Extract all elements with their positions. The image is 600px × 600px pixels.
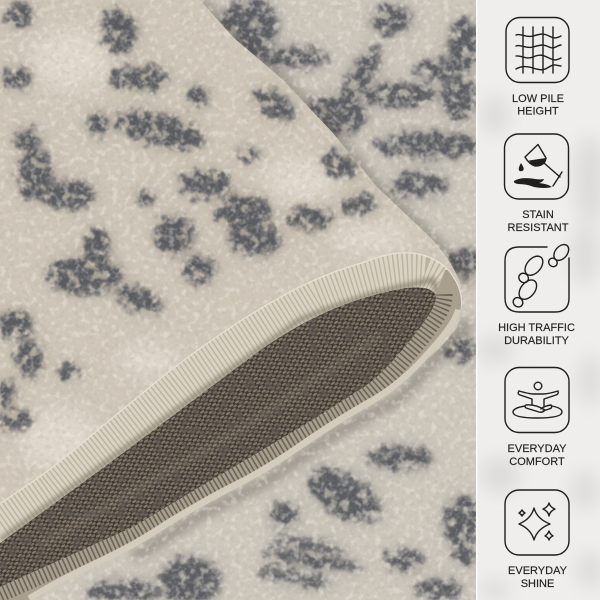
- rug photo: rolled rug face: [0, 0, 462, 470]
- feature: stain resistant: [504, 134, 569, 234]
- icon: sparkles: [505, 490, 569, 555]
- feature: everyday shine: [505, 490, 569, 590]
- icon: spilled wine: [504, 134, 568, 199]
- side panel: features: [476, 0, 600, 600]
- rug photo: grey binding edge lower: [0, 270, 470, 600]
- label: STAIN: [522, 209, 554, 221]
- rug photo: pile texture: [0, 0, 477, 600]
- label: LOW PILE: [512, 93, 564, 105]
- label: EVERYDAY: [508, 443, 567, 455]
- label: RESISTANT: [508, 222, 569, 234]
- label: HIGH TRAFFIC: [498, 322, 575, 334]
- icon: pile fibres: [506, 18, 569, 82]
- feature: everyday comfort: [505, 368, 569, 468]
- icon: meditating figure: [505, 368, 569, 432]
- feature: high traffic durability: [498, 242, 575, 347]
- feature: low pile height: [506, 18, 569, 118]
- rug photo: shadow under roll: [133, 0, 470, 558]
- label: HEIGHT: [517, 106, 559, 118]
- rug photo: woven backing: [0, 287, 436, 587]
- label: EVERYDAY: [508, 565, 568, 577]
- rug photo: cream binding edge upper: [0, 240, 470, 550]
- icon: footprints: [505, 242, 572, 312]
- label: COMFORT: [509, 456, 565, 468]
- label: DURABILITY: [504, 335, 570, 347]
- label: SHINE: [521, 578, 554, 590]
